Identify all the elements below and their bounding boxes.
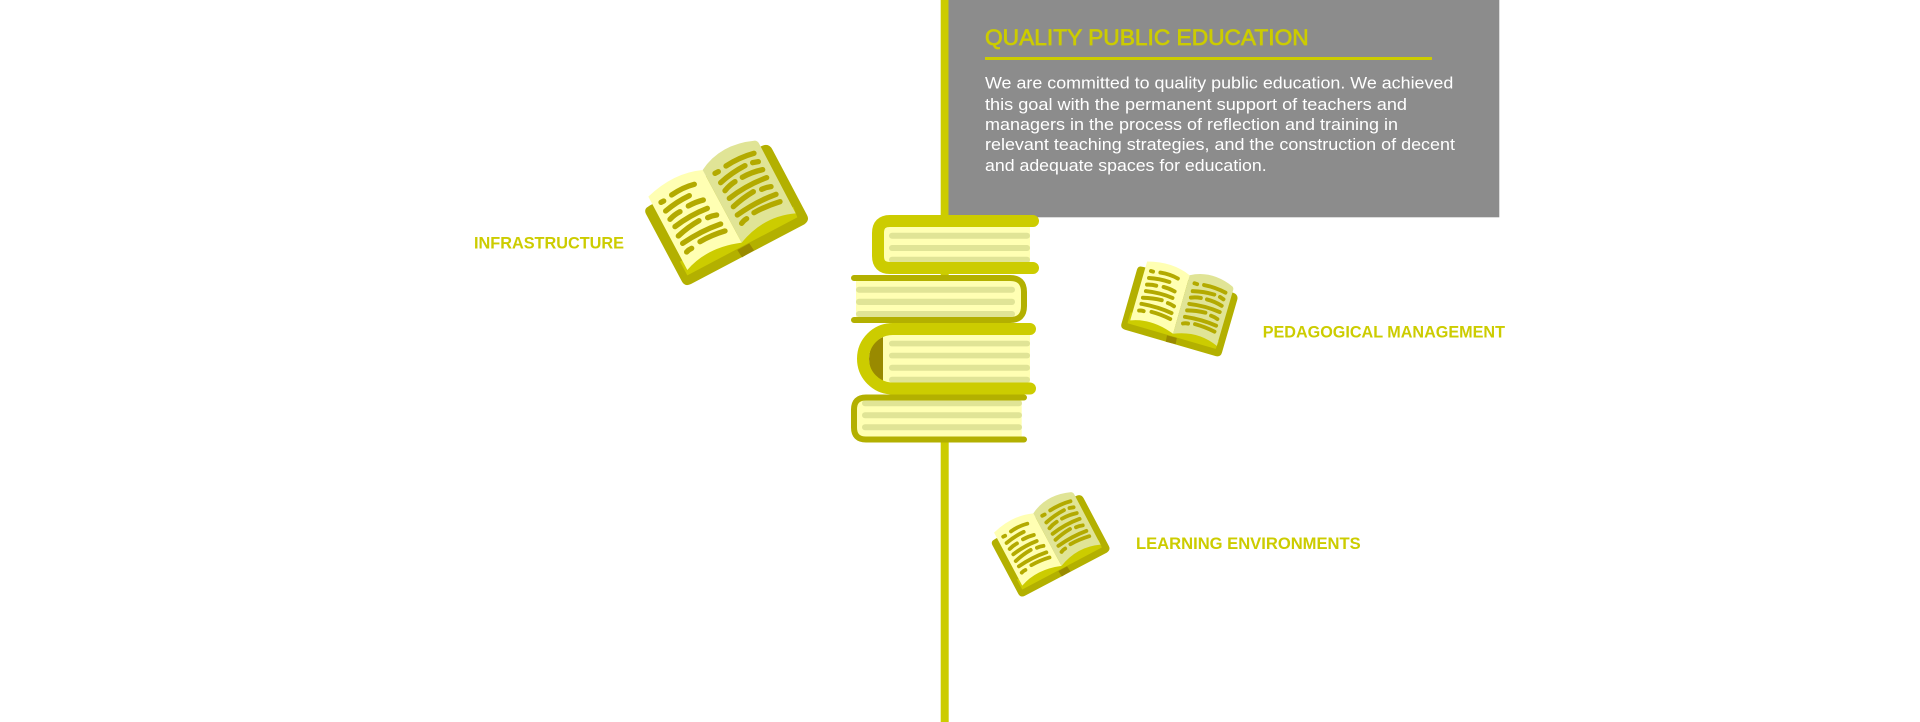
label: learning environments: LEARNING ENVIRONMENTS	[1136, 535, 1361, 553]
icon: stack of books	[854, 221, 1033, 440]
panel: quality public education	[948, 0, 1499, 217]
stacked book 1	[878, 221, 1033, 268]
panel heading: QUALITY PUBLIC EDUCATION	[985, 25, 1309, 50]
stacked book 2	[854, 278, 1024, 320]
panel body text: this goal with the permanent support of teachers and	[985, 95, 1407, 114]
label: pedagogical management: PEDAGOGICAL MANAGEMENT	[1263, 323, 1505, 341]
panel body text: relevant teaching strategies, and the construction of decent	[985, 135, 1455, 154]
panel body text: We are committed to quality public education. We achieved	[985, 74, 1453, 93]
panel body text	[985, 74, 1455, 175]
icon: open book, infrastructure	[645, 141, 808, 285]
vertical timeline line	[941, 0, 949, 722]
panel body text: managers in the process of reflection and training in	[985, 115, 1398, 134]
stacked book 3	[863, 329, 1030, 388]
label: infrastructure: INFRASTRUCTURE	[474, 234, 624, 252]
panel body text: and adequate spaces for education.	[985, 156, 1267, 175]
icon: open book, pedagogical management	[1100, 230, 1261, 390]
icon: open book, learning environments	[992, 492, 1110, 597]
stacked book 4	[854, 398, 1024, 440]
heading underline	[985, 57, 1432, 60]
